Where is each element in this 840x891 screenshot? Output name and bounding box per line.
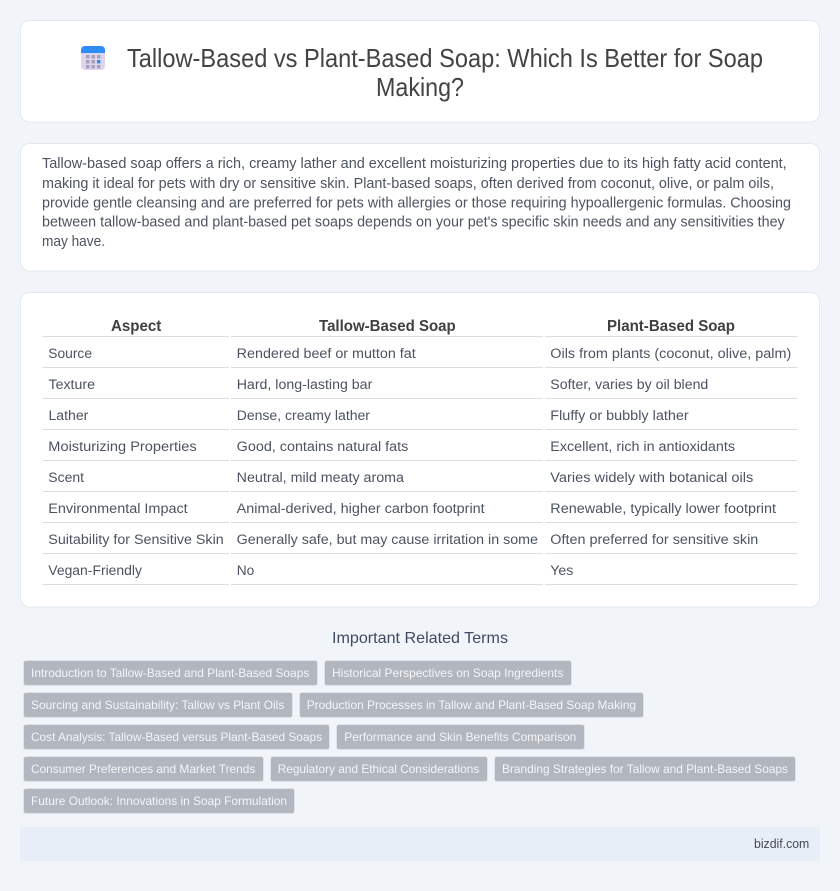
row: environmental impact: Renewable, typically lower footprint xyxy=(550,501,776,517)
title xyxy=(127,45,763,102)
tag: Regulatory and Ethical Considerations xyxy=(278,762,479,776)
row: lather: Lather xyxy=(48,408,89,424)
row: environmental impact: Animal-derived, higher carbon footprint xyxy=(237,501,485,517)
footer: site name: bizdif.com xyxy=(754,836,809,851)
row: suitability for sensitive skin: Suitability for Sensitive Skin xyxy=(48,532,224,548)
text block: introduction paragraph xyxy=(42,156,791,250)
row: lather: Dense, creamy lather xyxy=(237,408,370,424)
row: source: Rendered beef or mutton fat xyxy=(237,346,416,362)
row: scent: Varies widely with botanical oils xyxy=(550,470,753,486)
text block: introduction paragraph: may have. xyxy=(42,234,105,250)
tag xyxy=(324,660,572,686)
text block: introduction paragraph: Tallow-based soap offers a rich, creamy lather and excellent moisturizing properties due to its high fatty acid content, xyxy=(42,156,787,172)
tag xyxy=(24,756,264,782)
row: suitability for sensitive skin: Often preferred for sensitive skin xyxy=(550,532,758,548)
table header row: Tallow-Based Soap xyxy=(319,318,456,335)
row: moisturizing properties: Good, contains natural fats xyxy=(237,439,408,455)
tag: Sourcing and Sustainability: Tallow vs Plant Oils xyxy=(31,698,284,712)
heading: important related terms: Important Related Terms xyxy=(332,630,508,647)
tag xyxy=(24,660,318,686)
row: lather xyxy=(48,408,689,424)
table header row: Plant-Based Soap xyxy=(607,318,735,335)
tag xyxy=(270,756,488,782)
row: scent xyxy=(48,470,753,486)
row: moisturizing properties: Excellent, rich in antioxidants xyxy=(550,439,735,455)
tag: Branding Strategies for Tallow and Plant-Based Soaps xyxy=(502,762,788,776)
table header row: Aspect xyxy=(111,318,162,335)
row: suitability for sensitive skin: Generally safe, but may cause irritation in some xyxy=(237,532,538,548)
tag: Introduction to Tallow-Based and Plant-Based Soaps xyxy=(31,666,309,680)
panel: comparison table xyxy=(20,292,820,607)
text block: introduction paragraph: provide gentle cleansing and are preferred for pets with allergies or those requiring hypoallergenic formulas. Choosing xyxy=(42,196,791,212)
row: moisturizing properties xyxy=(48,439,735,455)
row: source xyxy=(48,346,791,362)
row: scent: Neutral, mild meaty aroma xyxy=(237,470,404,486)
tag xyxy=(24,692,292,718)
title: Making? xyxy=(376,74,464,102)
row: suitability for sensitive skin xyxy=(48,532,758,548)
tag xyxy=(300,692,644,718)
tag: Performance and Skin Benefits Comparison xyxy=(344,730,576,744)
panel: header xyxy=(20,20,820,122)
row: vegan-friendly: No xyxy=(237,563,254,579)
tag xyxy=(24,724,330,750)
tag: Production Processes in Tallow and Plant-Based Soap Making xyxy=(307,698,636,712)
row: environmental impact: Environmental Impact xyxy=(48,501,188,517)
row: texture: Softer, varies by oil blend xyxy=(550,377,708,393)
icon: calendar xyxy=(81,46,105,70)
tag: Consumer Preferences and Market Trends xyxy=(31,762,255,776)
tag list: related terms xyxy=(24,660,796,814)
title: Tallow-Based vs Plant-Based Soap: Which Is Better for Soap xyxy=(127,45,763,73)
row: scent: Scent xyxy=(48,470,84,486)
row: environmental impact xyxy=(48,501,776,517)
tag: Historical Perspectives on Soap Ingredients xyxy=(332,666,563,680)
row: vegan-friendly: Yes xyxy=(550,563,573,579)
row: source: Source xyxy=(48,346,92,362)
tag xyxy=(336,724,584,750)
row: lather: Fluffy or bubbly lather xyxy=(550,408,689,424)
row: vegan-friendly: Vegan-Friendly xyxy=(48,563,143,579)
table header row xyxy=(111,318,735,335)
row: texture xyxy=(48,377,708,393)
tag xyxy=(24,788,294,814)
row: vegan-friendly xyxy=(48,563,573,579)
row: source: Oils from plants (coconut, olive, palm) xyxy=(550,346,791,362)
text block: introduction paragraph: between tallow-based and plant-based pet soaps depends on your pet's specific skin needs and any sensitivities they xyxy=(42,214,785,230)
tag xyxy=(494,756,796,782)
tag: Future Outlook: Innovations in Soap Formulation xyxy=(31,794,287,808)
row: moisturizing properties: Moisturizing Properties xyxy=(48,439,197,455)
text block: introduction paragraph: making it ideal for pets with dry or sensitive skin. Plant-based soaps, often derived from coconut, olive, or palm oils, xyxy=(42,176,774,192)
row: texture: Hard, long-lasting bar xyxy=(237,377,373,393)
row: texture: Texture xyxy=(48,377,95,393)
tag: Cost Analysis: Tallow-Based versus Plant-Based Soaps xyxy=(31,730,322,744)
footer xyxy=(20,827,820,861)
panel: introduction xyxy=(20,144,820,271)
